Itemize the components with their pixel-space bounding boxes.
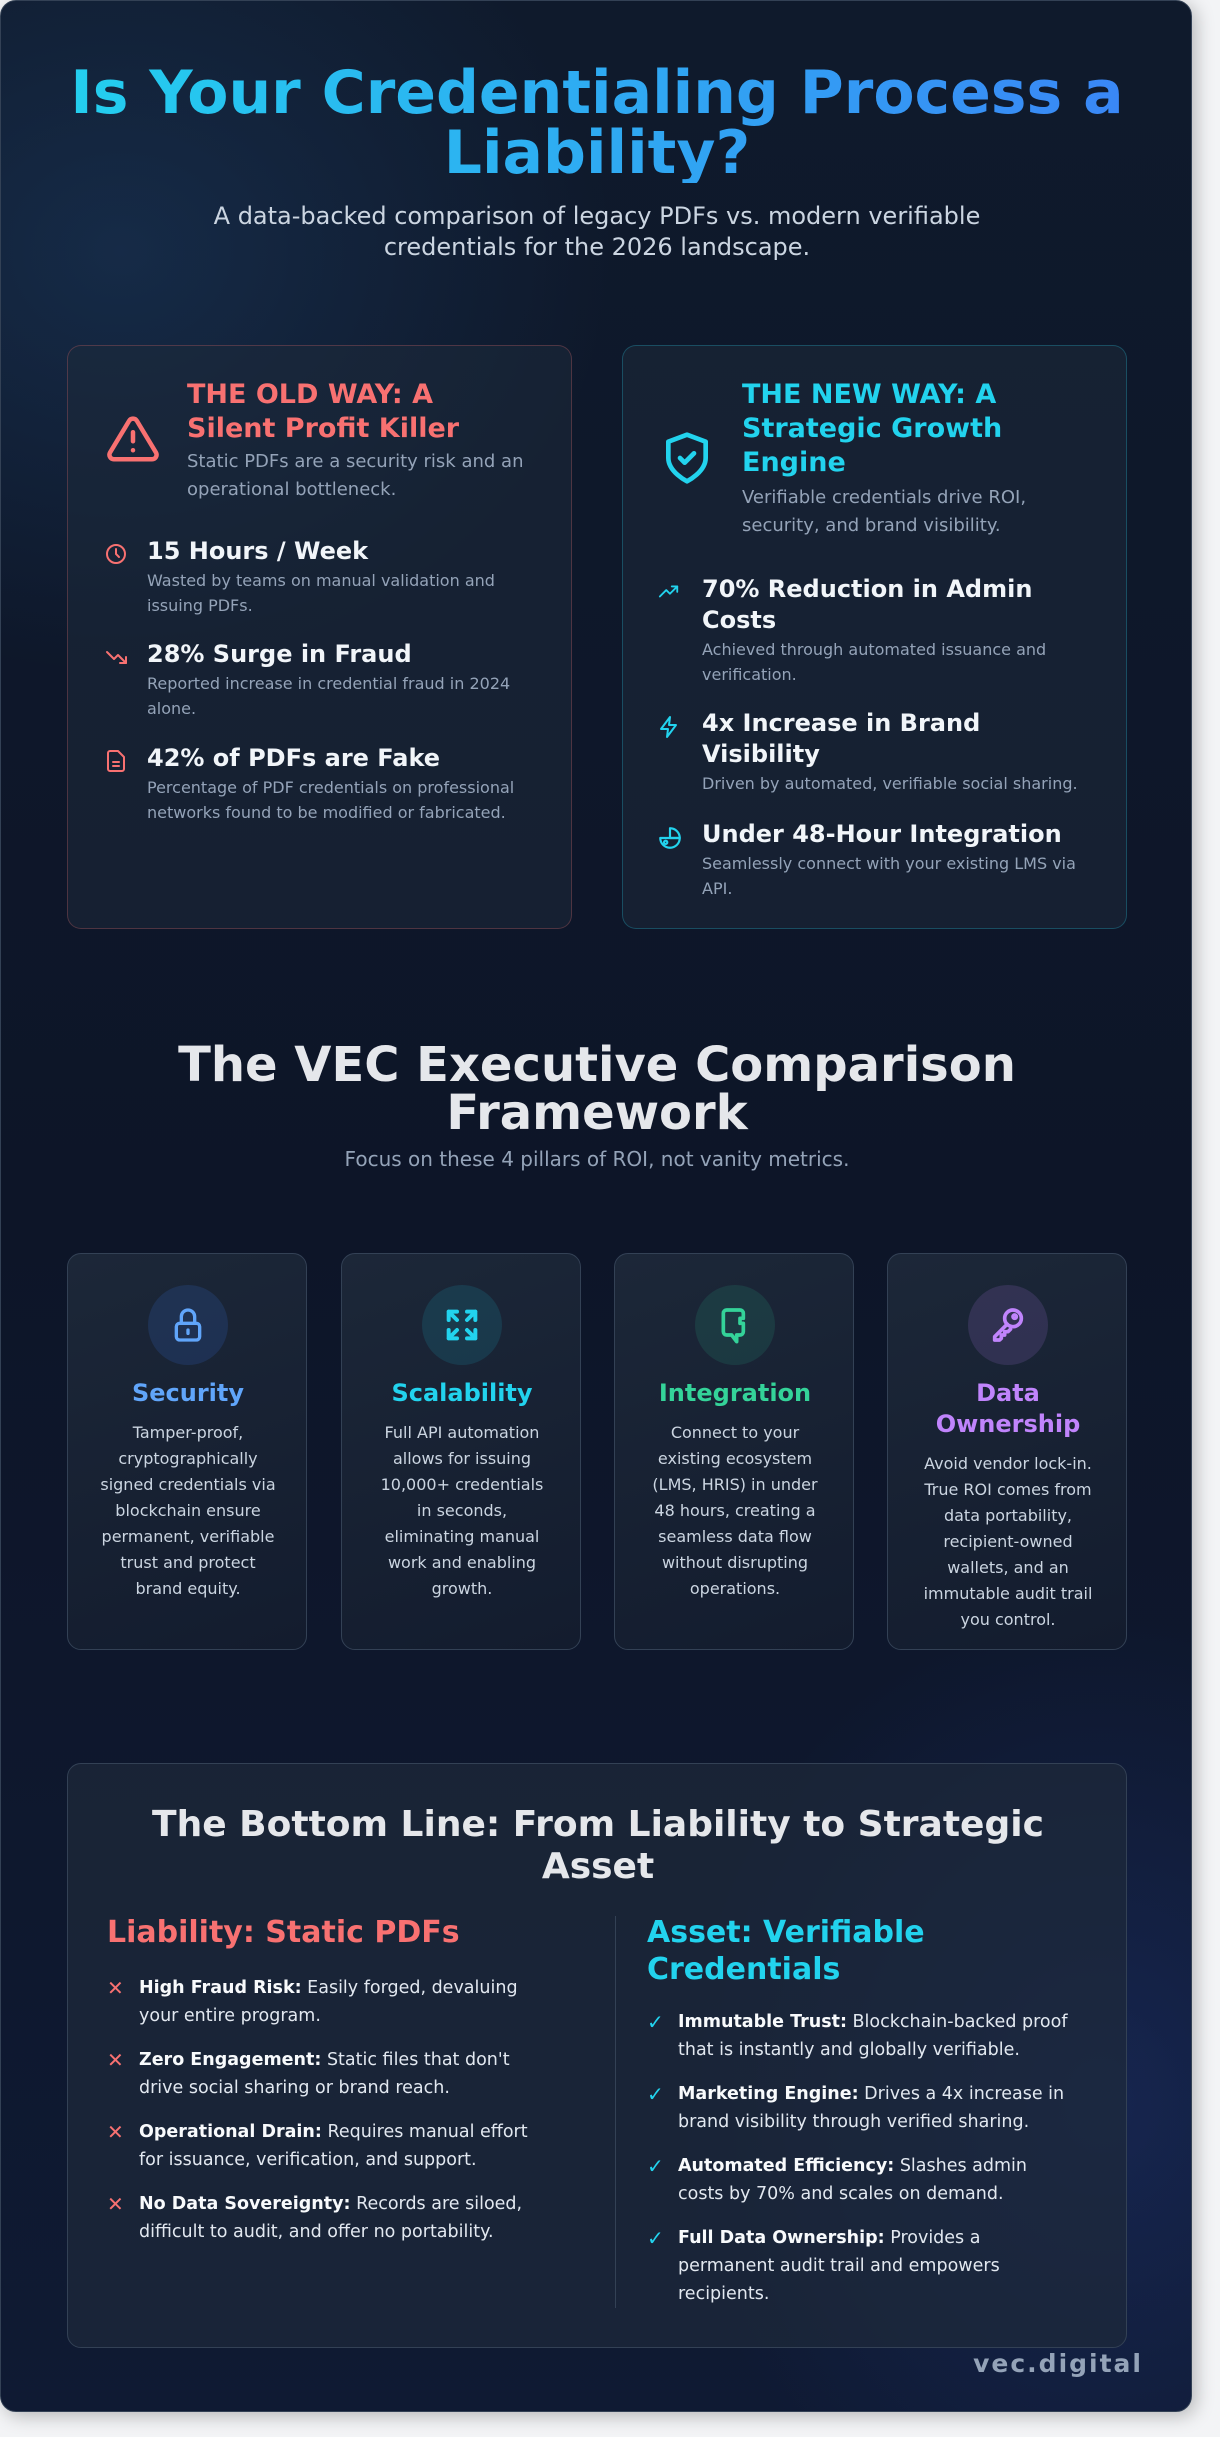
pillar: security bbox=[67, 1253, 307, 1650]
text: framework subtitle: Focus on these 4 pillars of ROI, not vanity metrics. bbox=[345, 1147, 849, 1171]
stat: 48-hour integration: Under 48-Hour Integration bbox=[702, 820, 1062, 848]
pillar: integration: operations. bbox=[690, 1579, 780, 1598]
text: old way description: Static PDFs are a security risk and an operational bottleneck. bbox=[187, 451, 523, 500]
column: liability: ✕ bbox=[107, 2192, 124, 2216]
stat: 15 hours: 15 Hours / Week bbox=[147, 537, 368, 565]
panel: bottom line bbox=[67, 1763, 1127, 2348]
pillar: integration: 48 hours, creating a bbox=[654, 1501, 816, 1520]
column: asset: ✓ bbox=[647, 2154, 664, 2178]
stat: 48-hour integration: Seamlessly connect with your existing LMS via API. bbox=[702, 854, 1076, 898]
column: liability: High Fraud Risk: Easily forged, devaluing your entire program. bbox=[139, 1978, 518, 2026]
stat: 70% reduction bbox=[658, 575, 1046, 684]
stat: 42% fake bbox=[107, 744, 514, 822]
pillar: integration: without disrupting bbox=[662, 1553, 808, 1572]
heading: new way: THE NEW WAY: A bbox=[742, 379, 996, 410]
column: asset: ✓ bbox=[647, 2010, 664, 2034]
subtitle bbox=[214, 202, 980, 261]
column: liability: ✕ bbox=[107, 2120, 124, 2144]
subtitle: A data-backed comparison of legacy PDFs vs. modern verifiable bbox=[214, 202, 980, 230]
heading: framework: Framework bbox=[446, 1085, 748, 1141]
heading: new way: Engine bbox=[742, 447, 846, 478]
heading: framework bbox=[178, 1037, 1016, 1141]
stat: 28% fraud: 28% Surge in Fraud bbox=[147, 640, 412, 668]
stat: 70% reduction: 70% Reduction in Admin bbox=[702, 575, 1032, 603]
column: liability: Liability: Static PDFs bbox=[107, 1915, 460, 1950]
icon: shield bbox=[666, 432, 708, 484]
heading: bottom line bbox=[152, 1804, 1044, 1887]
stat: 42% fake: 42% of PDFs are Fake bbox=[147, 744, 440, 772]
text: new way description: Verifiable credentials drive ROI, security, and brand visibility. bbox=[742, 487, 1026, 536]
stat: 4x visibility: Visibility bbox=[702, 740, 820, 768]
pillar: data ownership: Avoid vendor lock-in. True ROI comes from data portability, recipient-owned wallets, and an immutable audit trail you control. bbox=[924, 1454, 1092, 1629]
heading: bottom line: Asset bbox=[542, 1846, 654, 1887]
heading: old way bbox=[187, 379, 459, 444]
divider bbox=[615, 1916, 616, 2308]
pillar: integration: Integration bbox=[659, 1379, 811, 1407]
column: liability: Zero Engagement: Static files that don't drive social sharing or brand reach. bbox=[139, 2050, 510, 2098]
stat: 48-hour integration bbox=[659, 820, 1076, 898]
icon: warning bbox=[107, 416, 159, 462]
stat: 15 hours: Wasted by teams on manual validation and issuing PDFs. bbox=[147, 571, 495, 615]
pillar: data ownership: Data bbox=[976, 1379, 1040, 1407]
panel: old way bbox=[67, 345, 572, 929]
pillar: integration: (LMS, HRIS) in under bbox=[652, 1475, 818, 1494]
column: liability bbox=[107, 1915, 528, 2242]
column: asset: Immutable Trust: Blockchain-backed proof that is instantly and globally verifiable. bbox=[678, 2012, 1067, 2060]
stat: 15 hours bbox=[106, 537, 495, 615]
stat: 4x visibility: Driven by automated, verifiable social sharing. bbox=[702, 774, 1078, 793]
heading: new way: Strategic Growth bbox=[742, 413, 1002, 444]
column: asset: Asset: Verifiable bbox=[647, 1915, 925, 1950]
stat: 70% reduction: Costs bbox=[702, 606, 776, 634]
heading: framework: The VEC Executive Comparison bbox=[178, 1037, 1016, 1093]
stat: 28% fraud: Reported increase in credential fraud in 2024 alone. bbox=[147, 674, 510, 718]
footer: brand: vec.digital bbox=[973, 2349, 1143, 2378]
column: liability: ✕ bbox=[107, 1976, 124, 2000]
pillar: security: Security bbox=[132, 1379, 244, 1407]
stat: 28% fraud bbox=[106, 640, 510, 718]
pillar: data ownership: Ownership bbox=[936, 1410, 1080, 1438]
subtitle: credentials for the 2026 landscape. bbox=[384, 233, 810, 261]
column: liability: ✕ bbox=[107, 2048, 124, 2072]
pillar: integration bbox=[614, 1253, 854, 1650]
column: liability: No Data Sovereignty: Records are siloed, difficult to audit, and offer no portability. bbox=[139, 2194, 522, 2242]
pillar: security: Tamper-proof, cryptographically signed credentials via blockchain ensure permanent, verifiable trust and protect brand equity. bbox=[100, 1423, 276, 1598]
panel: new way bbox=[622, 345, 1127, 929]
stat: 70% reduction: Achieved through automated issuance and verification. bbox=[702, 640, 1046, 684]
title bbox=[1, 63, 1193, 183]
title: Liability? bbox=[444, 118, 750, 188]
pillar: integration: seamless data flow bbox=[658, 1527, 812, 1546]
pillar: scalability bbox=[341, 1253, 581, 1650]
heading: bottom line: The Bottom Line: From Liability to Strategic bbox=[152, 1804, 1044, 1845]
stat: 4x visibility: 4x Increase in Brand bbox=[702, 709, 980, 737]
column: asset: Automated Efficiency: Slashes admin bbox=[678, 2156, 1027, 2176]
stat: 4x visibility bbox=[660, 709, 1078, 793]
column: asset bbox=[647, 1915, 1068, 2304]
icon: key bbox=[968, 1285, 1048, 1365]
column: asset: Marketing Engine: Drives a 4x increase in brand visibility through verified sharing. bbox=[678, 2084, 1064, 2132]
icon: expand bbox=[422, 1285, 502, 1365]
pillar: integration: existing ecosystem bbox=[658, 1449, 812, 1468]
column: asset: costs by 70% and scales on demand. bbox=[678, 2184, 1004, 2204]
stat: 42% fake: Percentage of PDF credentials on professional networks found to be modified or fabricated. bbox=[147, 778, 514, 822]
column: asset: ✓ bbox=[647, 2082, 664, 2106]
column: asset: ✓ bbox=[647, 2226, 664, 2250]
pillar: scalability: in seconds, eliminating manual work and enabling growth. bbox=[385, 1501, 539, 1598]
heading: new way bbox=[742, 379, 1002, 478]
column: liability: Operational Drain: Requires manual effort for issuance, verification, and support. bbox=[139, 2122, 528, 2170]
heading: old way: THE OLD WAY: A bbox=[187, 379, 433, 410]
pillar: data ownership bbox=[887, 1253, 1127, 1650]
pillar: scalability: Full API automation allows for issuing 10,000+ credentials bbox=[381, 1423, 543, 1494]
heading: old way: Silent Profit Killer bbox=[187, 413, 459, 444]
icon: lock bbox=[148, 1285, 228, 1365]
pillar: integration: Connect to your bbox=[671, 1423, 799, 1442]
column: asset: Full Data Ownership: Provides a permanent audit trail and empowers recipients. bbox=[678, 2228, 1000, 2304]
icon: plug bbox=[695, 1285, 775, 1365]
column: asset: Credentials bbox=[647, 1952, 840, 1987]
title: Is Your Credentialing Process a bbox=[70, 58, 1124, 128]
pillar: scalability: Scalability bbox=[391, 1379, 533, 1407]
